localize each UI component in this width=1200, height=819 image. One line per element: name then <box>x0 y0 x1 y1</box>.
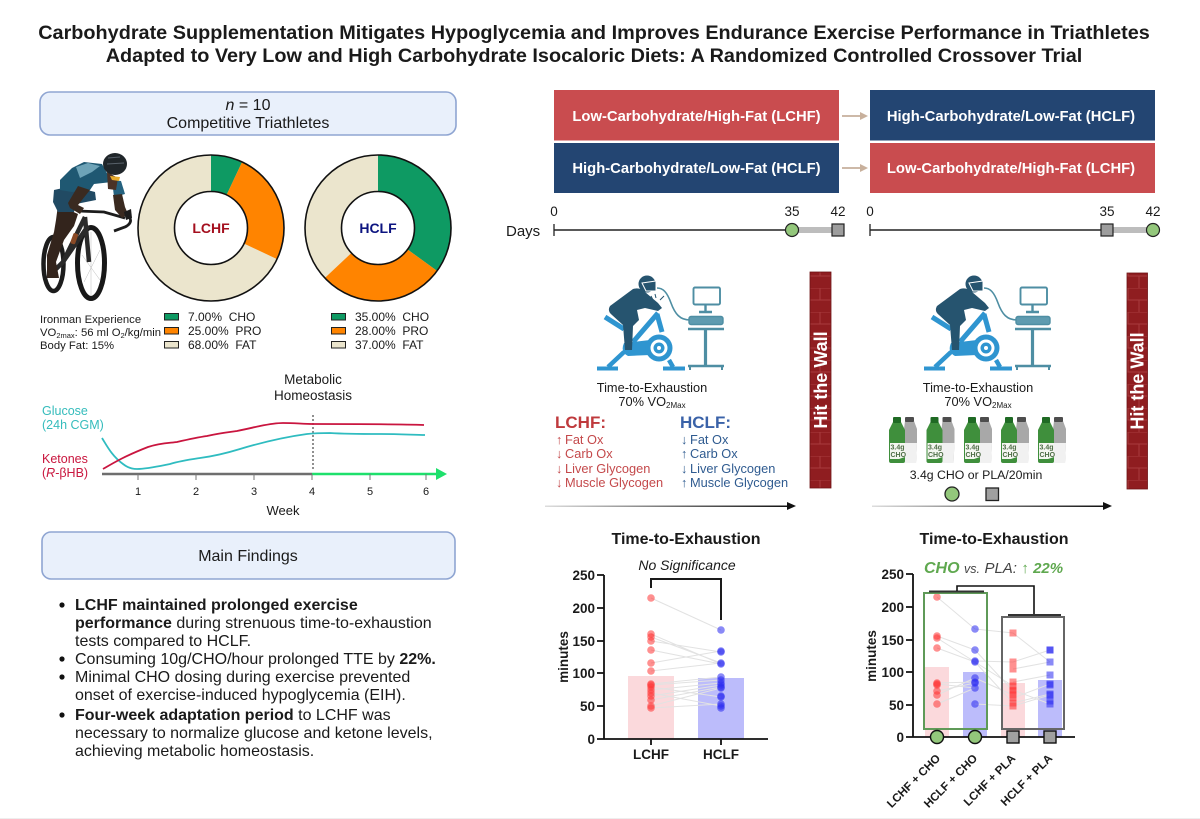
chart: LCHF macronutrient donut: LCHF <box>192 220 230 236</box>
text: main findings list: performance during strenuous time-to-exhaustion <box>75 615 432 632</box>
text: main findings list: onset of exercise-induced hypoglycemia (EIH). <box>75 687 406 704</box>
timeline: second period days: 0 <box>866 204 874 219</box>
text: participant characteristics <box>40 314 161 352</box>
icon: supplement bottles: 3.4g <box>890 444 905 452</box>
panel: crossover diet design: Low-Carbohydrate/High-Fat (LCHF) <box>572 109 821 125</box>
chart: time-to-exhaustion LCHF vs HCLF: LCHF <box>633 747 669 762</box>
text: HCLF metabolic effects: ↑ <box>681 475 687 490</box>
legend: HCLF macronutrients <box>332 310 429 352</box>
timeline: first period days: 35 <box>784 204 800 219</box>
icon: cyclist on ergometer with metabolic cart (right) <box>924 276 1051 370</box>
timeline: first period days <box>506 204 846 240</box>
chart: time-to-exhaustion by diet and supplement <box>864 531 1075 811</box>
icon: supplement bottles: 3.4g <box>1002 444 1017 452</box>
chart: glucose and ketones over weeks: 3 <box>251 486 257 498</box>
text: main findings list: Minimal CHO dosing during exercise prevented <box>75 669 410 686</box>
chart: glucose and ketones over weeks: 4 <box>309 486 315 498</box>
chart: time-to-exhaustion by diet and supplement: minutes <box>864 630 879 682</box>
text: dosing schedule with markers: 3.4g CHO or PLA/20min <box>910 468 1042 482</box>
text: LCHF metabolic effects: Liver Glycogen <box>565 461 650 476</box>
timeline: first period days: 0 <box>550 204 558 219</box>
arrow: progression (right) <box>872 502 1112 510</box>
legend: LCHF macronutrients: 7.00% CHO <box>188 310 255 324</box>
icon: brick wall (left): Hit the Wall <box>811 331 831 429</box>
icon: supplement bottles: CHO <box>928 452 944 459</box>
icon: cyclist on ergometer with metabolic cart (left) <box>597 276 724 370</box>
chart: time-to-exhaustion by diet and supplement: 200 <box>881 600 904 615</box>
chart: time-to-exhaustion LCHF vs HCLF: Time-to-Exhaustion <box>611 531 761 548</box>
icon: supplement bottles: CHO <box>966 452 982 459</box>
text: participant characteristics: 2 <box>120 331 125 340</box>
text: participant characteristics: : 56 ml O <box>75 327 121 339</box>
icon: supplement bottles: 3.4g <box>966 444 980 452</box>
legend: LCHF macronutrients: 68.00% FAT <box>188 338 257 352</box>
chart: glucose and ketones over weeks <box>42 372 447 518</box>
icon: supplement bottles: CHO <box>1040 452 1056 459</box>
text: main findings list: Four-week adaptation period to LCHF was <box>75 707 391 724</box>
chart: glucose and ketones over weeks: 2 <box>193 486 199 498</box>
text: LCHF metabolic effects: Carb Ox <box>565 446 613 461</box>
panel: main findings header: Main Findings <box>198 548 298 565</box>
icon: brick wall (left) <box>810 272 831 488</box>
panel: crossover diet design: Low-Carbohydrate/High-Fat (LCHF) <box>887 161 1135 177</box>
text: main findings list: necessary to normalize glucose and ketone levels, <box>75 725 433 742</box>
chart: time-to-exhaustion by diet and supplement: LCHF + CHO <box>885 752 943 811</box>
text: main findings list <box>59 597 436 760</box>
chart: time-to-exhaustion LCHF vs HCLF: 100 <box>572 666 595 681</box>
icon: brick wall (right): Hit the Wall <box>1128 332 1148 430</box>
chart: time-to-exhaustion LCHF vs HCLF: 200 <box>572 601 595 616</box>
text: HCLF metabolic effects: Liver Glycogen <box>690 461 775 476</box>
text: HCLF metabolic effects: ↑ <box>681 446 687 461</box>
legend: HCLF macronutrients: 35.00% CHO <box>355 310 429 324</box>
panel: participants header: n = 10 <box>226 97 271 114</box>
text: time-to-exhaustion protocol (left) <box>597 380 707 410</box>
timeline: second period days <box>866 204 1161 236</box>
chart: glucose and ketones over weeks: Ketones <box>42 452 88 466</box>
timeline: first period days: 42 <box>830 204 846 219</box>
text: HCLF metabolic effects: ↓ <box>681 461 687 476</box>
chart: glucose and ketones over weeks: (R-βHB) <box>42 466 88 480</box>
text: main findings list: achieving metabolic homeostasis. <box>75 743 314 760</box>
chart: time-to-exhaustion by diet and supplement: 250 <box>881 567 904 582</box>
chart: glucose and ketones over weeks: (24h CGM) <box>42 418 104 432</box>
chart: time-to-exhaustion LCHF vs HCLF: 0 <box>587 732 595 747</box>
arrow: progression (left) <box>545 502 796 510</box>
chart: time-to-exhaustion by diet and supplement: LCHF + PLA <box>961 751 1019 809</box>
text: LCHF metabolic effects: Muscle Glycogen <box>565 475 663 490</box>
text: main findings list: LCHF maintained prolonged exercise <box>75 597 358 614</box>
title <box>38 22 1150 67</box>
chart: glucose and ketones over weeks: 1 <box>135 486 141 498</box>
text: HCLF metabolic effects: HCLF: <box>680 413 731 432</box>
panel: crossover diet design: High-Carbohydrate/Low-Fat (HCLF) <box>887 109 1135 125</box>
chart: time-to-exhaustion by diet and supplement: 100 <box>881 665 904 680</box>
legend: LCHF macronutrients <box>164 310 261 352</box>
chart: time-to-exhaustion by diet and supplement: CHO vs. PLA: ↑ 22% <box>924 560 1063 577</box>
chart: time-to-exhaustion by diet and supplement: 50 <box>889 698 904 713</box>
chart: time-to-exhaustion LCHF vs HCLF: 250 <box>572 568 595 583</box>
text: participant characteristics: 2max <box>56 331 75 340</box>
text: HCLF metabolic effects: Carb Ox <box>690 446 738 461</box>
text: HCLF metabolic effects: Muscle Glycogen <box>690 475 788 490</box>
text: LCHF metabolic effects: ↑ <box>556 432 562 447</box>
legend: LCHF macronutrients: 25.00% PRO <box>188 324 261 338</box>
text: LCHF metabolic effects: ↓ <box>556 461 562 476</box>
icon: cyclist <box>44 153 132 298</box>
text: time-to-exhaustion protocol (left): 2Max <box>666 401 686 410</box>
chart: glucose and ketones over weeks: Glucose <box>42 404 88 418</box>
text: LCHF metabolic effects: LCHF: <box>555 413 606 432</box>
text: dosing schedule with markers <box>910 468 1042 501</box>
panel: main findings header <box>42 532 455 579</box>
chart: glucose and ketones over weeks: 5 <box>367 486 373 498</box>
text: LCHF metabolic effects: Fat Ox <box>565 432 604 447</box>
panel: participants header: Competitive Triathletes <box>167 115 329 132</box>
icon: supplement bottles <box>889 417 1066 463</box>
chart: time-to-exhaustion LCHF vs HCLF: No Significance <box>638 557 736 573</box>
text: HCLF metabolic effects: Fat Ox <box>690 432 729 447</box>
chart: LCHF macronutrient donut <box>138 155 284 301</box>
text: time-to-exhaustion protocol (right) <box>923 380 1033 410</box>
title: Adapted to Very Low and High Carbohydrate Isocaloric Diets: A Randomized Controlled Crossover Trial <box>106 45 1082 67</box>
text: time-to-exhaustion protocol (left): Time-to-Exhaustion <box>597 380 707 395</box>
chart: time-to-exhaustion by diet and supplement: 150 <box>881 633 904 648</box>
text: time-to-exhaustion protocol (right): 70% VO <box>944 394 992 409</box>
icon: supplement bottles: 3.4g <box>928 444 942 452</box>
text: LCHF metabolic effects: ↓ <box>556 475 562 490</box>
panel: crossover diet design: High-Carbohydrate/Low-Fat (HCLF) <box>572 161 821 177</box>
chart: glucose and ketones over weeks: Homeostasis <box>274 388 352 403</box>
icon: supplement bottles: CHO <box>1002 452 1019 459</box>
panel: participants header <box>40 92 456 135</box>
chart: time-to-exhaustion by diet and supplement: HCLF + PLA <box>998 751 1056 809</box>
text: time-to-exhaustion protocol (right): Time-to-Exhaustion <box>923 380 1033 395</box>
chart: HCLF macronutrient donut: HCLF <box>359 220 397 236</box>
chart: glucose and ketones over weeks: 6 <box>423 486 429 498</box>
legend: HCLF macronutrients: 28.00% PRO <box>355 324 428 338</box>
legend: HCLF macronutrients: 37.00% FAT <box>355 338 424 352</box>
text: participant characteristics: VO <box>40 327 56 339</box>
text: main findings list: tests compared to HCLF. <box>75 633 251 650</box>
icon: brick wall (right) <box>1127 273 1148 489</box>
chart: time-to-exhaustion by diet and supplement: HCLF + CHO <box>922 752 980 811</box>
text: participant characteristics: /kg/min <box>125 327 161 339</box>
text: participant characteristics: Body Fat: 15% <box>40 340 114 352</box>
text: HCLF metabolic effects: ↓ <box>681 432 687 447</box>
timeline: second period days: 35 <box>1099 204 1115 219</box>
text: time-to-exhaustion protocol (left): 70% VO <box>618 394 666 409</box>
text: participant characteristics: Ironman Experience <box>40 314 141 326</box>
text: HCLF metabolic effects <box>680 413 788 490</box>
chart: time-to-exhaustion LCHF vs HCLF <box>556 531 768 762</box>
chart: time-to-exhaustion by diet and supplement: Time-to-Exhaustion <box>919 531 1069 548</box>
chart: glucose and ketones over weeks: Week <box>266 503 300 518</box>
timeline: first period days: Days <box>506 223 540 240</box>
chart: time-to-exhaustion LCHF vs HCLF: minutes <box>556 631 571 683</box>
text: time-to-exhaustion protocol (right): 2Max <box>992 401 1012 410</box>
chart: glucose and ketones over weeks: Metabolic <box>284 372 342 387</box>
title: Carbohydrate Supplementation Mitigates Hypoglycemia and Improves Endurance Exercise Performance in Triathletes <box>38 22 1150 44</box>
chart: time-to-exhaustion by diet and supplement: 0 <box>896 730 904 745</box>
panel: crossover diet design <box>554 90 1155 193</box>
chart: HCLF macronutrient donut <box>305 155 451 301</box>
icon: supplement bottles: 3.4g <box>1040 444 1054 452</box>
icon: supplement bottles: CHO <box>890 452 907 459</box>
text: LCHF metabolic effects <box>555 413 663 490</box>
chart: time-to-exhaustion LCHF vs HCLF: 50 <box>580 699 595 714</box>
text: main findings list: Consuming 10g/CHO/hour prolonged TTE by 22%. <box>75 651 436 668</box>
text: LCHF metabolic effects: ↓ <box>556 446 562 461</box>
chart: time-to-exhaustion LCHF vs HCLF: HCLF <box>703 747 739 762</box>
chart: time-to-exhaustion LCHF vs HCLF: 150 <box>572 634 595 649</box>
timeline: second period days: 42 <box>1145 204 1161 219</box>
